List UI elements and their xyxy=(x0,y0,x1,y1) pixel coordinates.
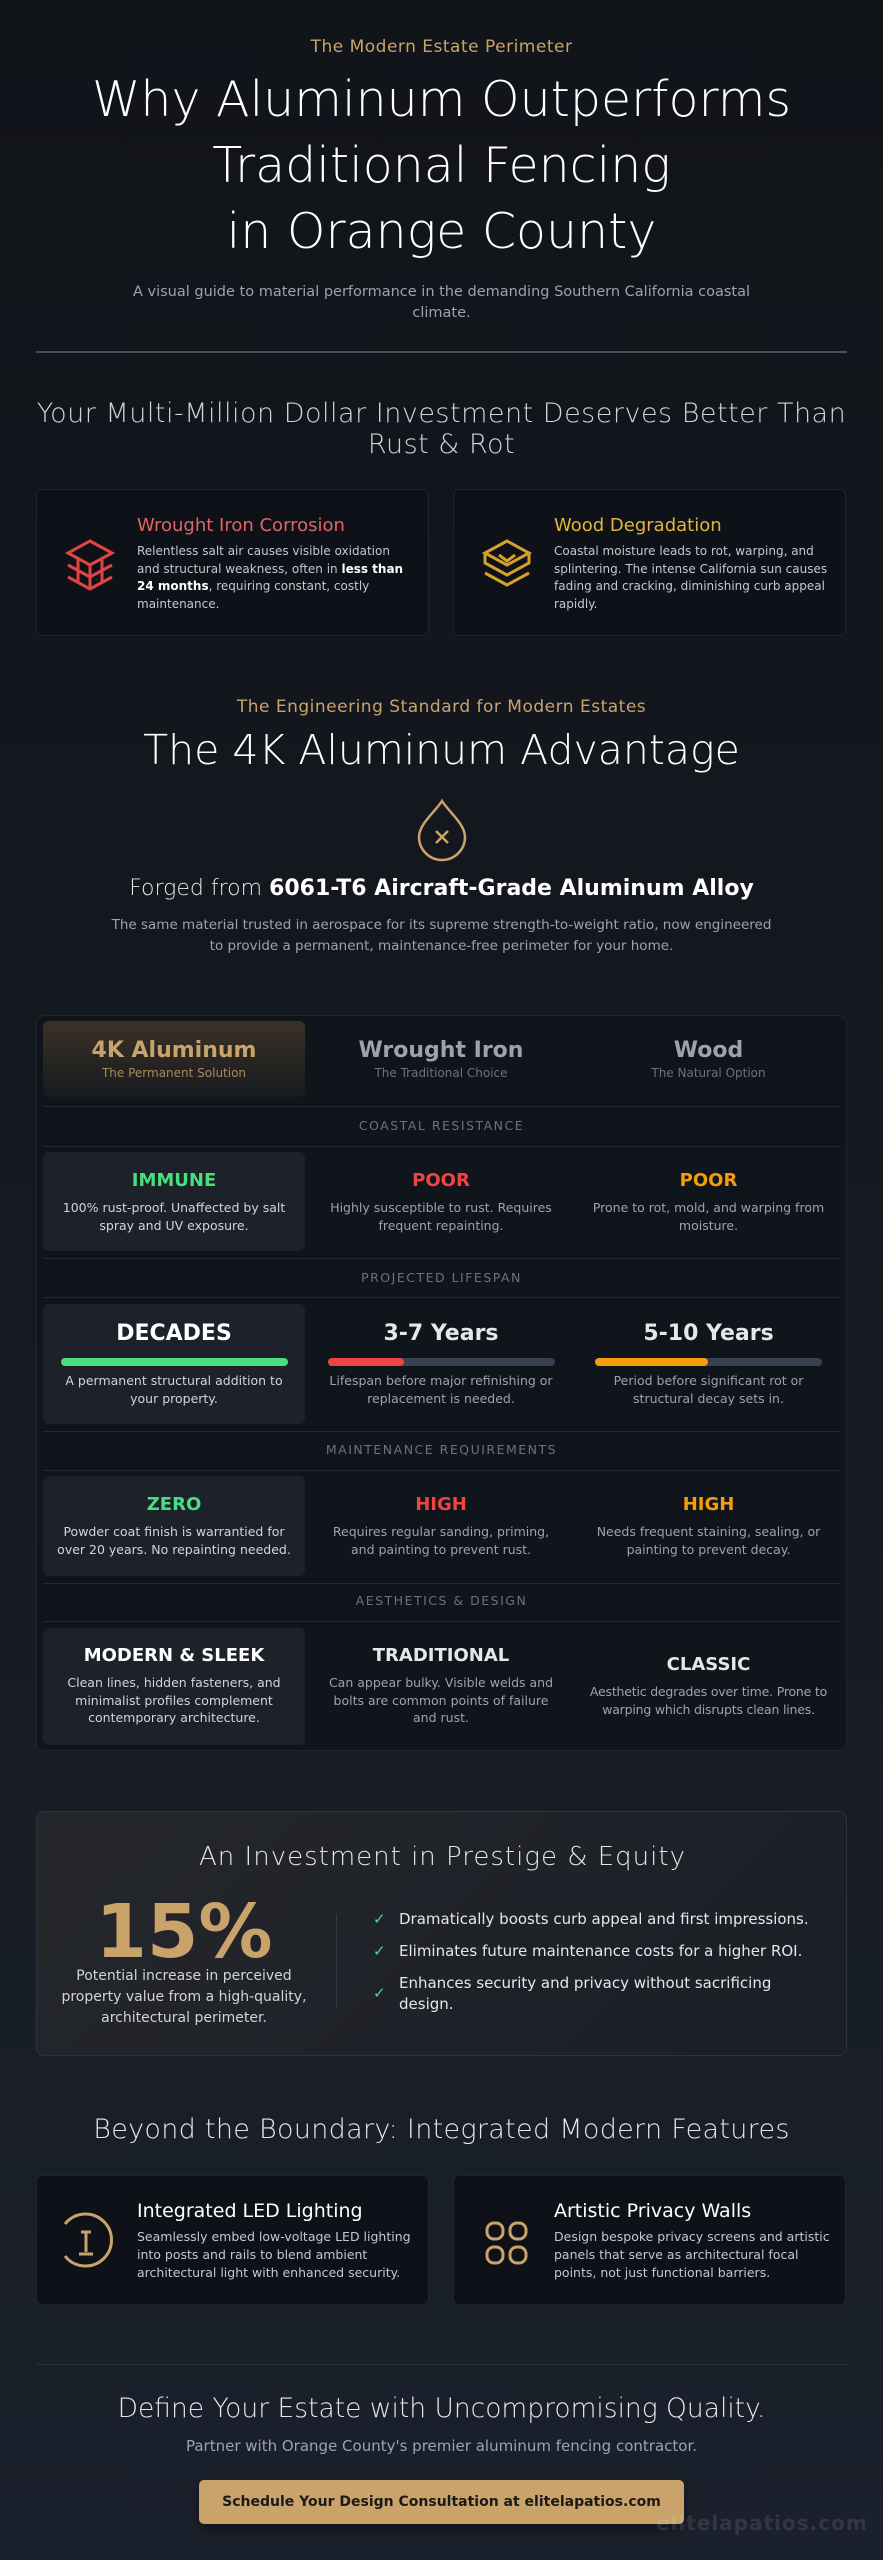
stat caption: Potential increase in perceived property value from a high-quality, architectural perimeter. xyxy=(61,1968,307,2026)
row: coastal resistance: POOR xyxy=(412,1170,470,1191)
row: coastal resistance: 100% rust-proof. Unaffected by salt spray and UV exposure. xyxy=(63,1200,285,1232)
subheading: forged from 6061-T6: Forged from 6061-T6 Aircraft-Grade Aluminum Alloy xyxy=(129,876,754,901)
title: Traditional Fencing xyxy=(212,137,671,194)
watermark: elitelapatios.com xyxy=(656,2511,868,2535)
header: 4K aluminum: The Permanent Solution xyxy=(102,1066,246,1080)
header: wood: Wood xyxy=(674,1038,743,1063)
row: aesthetics: Aesthetic degrades over time. Prone to warping which disrupts clean lines. xyxy=(590,1684,827,1716)
panel: privacy walls xyxy=(453,2175,846,2305)
header: wrought iron: Wrought Iron xyxy=(359,1038,523,1063)
header: wood: The Natural Option xyxy=(651,1066,766,1080)
row: aesthetics: Clean lines, hidden fasteners, and minimalist profiles complement contemporary architecture. xyxy=(67,1675,281,1725)
icon: layered wood xyxy=(482,539,532,587)
label: maintenance requirements: MAINTENANCE REQUIREMENTS xyxy=(326,1442,557,1457)
row: lifespan with bars: 5-10 Years xyxy=(643,1321,774,1346)
heading: 4K aluminum advantage: The 4K Aluminum Advantage xyxy=(143,726,740,774)
comparison table xyxy=(36,1015,847,1751)
row: maintenance xyxy=(43,1476,820,1576)
title: Wood Degradation xyxy=(554,515,722,536)
header: wood xyxy=(651,1038,766,1080)
row: lifespan with bars: Period before significant rot or structural decay sets in. xyxy=(614,1373,803,1406)
row: coastal resistance xyxy=(43,1152,824,1251)
checklist: ✓ xyxy=(373,1984,386,2002)
row: coastal resistance: Highly susceptible to rust. Requires frequent repainting. xyxy=(330,1200,552,1232)
checklist: Dramatically boosts curb appeal and first impressions. xyxy=(399,1910,809,1928)
row: coastal resistance: Prone to rot, mold, and warping from moisture. xyxy=(593,1200,824,1232)
row: maintenance: Powder coat finish is warrantied for over 20 years. No repainting needed. xyxy=(57,1524,291,1556)
heading: define your estate: Define Your Estate with Uncompromising Quality. xyxy=(118,2393,765,2424)
body: Design bespoke privacy screens and artistic panels that serve as architectural focal points, not just functional barriers. xyxy=(554,2229,830,2280)
row: lifespan with bars xyxy=(43,1304,822,1424)
row: lifespan with bars: DECADES xyxy=(116,1321,232,1346)
checklist: Enhances security and privacy without sacrificing design. xyxy=(399,1974,771,2013)
title: Integrated LED Lighting xyxy=(137,2200,363,2222)
row: aesthetics: TRADITIONAL xyxy=(373,1645,509,1666)
text: partner: Partner with Orange County's premier aluminum fencing contractor. xyxy=(186,2437,697,2455)
header: wrought iron xyxy=(359,1038,523,1080)
heading: An Investment in Prestige & Equity xyxy=(199,1842,686,1872)
row: lifespan with bars: Lifespan before major refinishing or replacement is needed. xyxy=(329,1373,553,1406)
checklist: ✓ xyxy=(373,1942,386,1960)
body: Relentless salt air causes visible oxidation and structural weakness, often in less than 24 months, requiring constant, costly maintenance. xyxy=(137,544,403,610)
panel: wood degradation xyxy=(453,489,846,636)
label: projected lifespan: PROJECTED LIFESPAN xyxy=(361,1270,522,1285)
title: Why Aluminum Outperforms xyxy=(92,71,791,128)
row: coastal resistance: POOR xyxy=(680,1170,737,1191)
stat: 15%: 15% xyxy=(95,1889,273,1975)
header: 4K aluminum: 4K Aluminum xyxy=(92,1038,256,1063)
header: wrought iron: The Traditional Choice xyxy=(374,1066,508,1080)
heading: beyond the boundary: Beyond the Boundary: Integrated Modern Features xyxy=(93,2114,790,2145)
row: aesthetics: CLASSIC xyxy=(667,1654,750,1675)
icon: panels grid xyxy=(486,2222,528,2264)
eyebrow: modern estate perimeter: The Modern Estate Perimeter xyxy=(311,37,572,57)
title: Wrought Iron Corrosion xyxy=(137,515,345,536)
eyebrow: engineering standard: The Engineering Standard for Modern Estates xyxy=(237,697,646,717)
checklist: ✓ xyxy=(373,1910,386,1928)
row: maintenance: HIGH xyxy=(683,1494,734,1515)
label: aesthetics and design: AESTHETICS & DESIGN xyxy=(356,1593,527,1608)
row: lifespan with bars: 3-7 Years xyxy=(383,1321,499,1346)
icon: corroded structure xyxy=(65,539,115,591)
subtitle: A visual guide to material performance in the demanding Southern California coastal climate. xyxy=(133,284,750,321)
button: schedule consultation: Schedule Your Design Consultation at elitelapatios.com xyxy=(222,2494,661,2510)
row: aesthetics: Can appear bulky. Visible welds and bolts are common points of failure and rust. xyxy=(329,1675,553,1725)
title xyxy=(92,71,791,260)
panel: wrought iron corrosion xyxy=(36,489,429,636)
row: aesthetics: MODERN & SLEEK xyxy=(84,1645,264,1666)
header: 4K aluminum xyxy=(43,1021,305,1097)
panel: LED lighting xyxy=(36,2175,429,2305)
paragraph: The same material trusted in aerospace for its supreme strength-to-weight ratio, now engineered to provide a permanent, maintenance-free perimeter for your home. xyxy=(112,917,771,954)
title: in Orange County xyxy=(227,203,656,260)
checklist: Eliminates future maintenance costs for a higher ROI. xyxy=(399,1942,802,1960)
body: Coastal moisture leads to rot, warping, and splintering. The intense California sun causes fading and cracking, diminishing curb appeal rapidly. xyxy=(554,544,827,610)
row: maintenance: HIGH xyxy=(415,1494,467,1515)
button: schedule consultation xyxy=(199,2480,684,2524)
checklist xyxy=(373,1910,809,2013)
row: maintenance: Requires regular sanding, priming, and painting to prevent rust. xyxy=(333,1524,549,1556)
heading: investment deserves better: Your Multi-Million Dollar Investment Deserves Better Than Rust & Rot xyxy=(37,398,846,460)
row: lifespan with bars: A permanent structural addition to your property. xyxy=(65,1373,283,1406)
row: maintenance: Needs frequent staining, sealing, or painting to prevent decay. xyxy=(597,1524,820,1556)
icon: lighting xyxy=(64,2212,113,2268)
label: coastal resistance: COASTAL RESISTANCE xyxy=(359,1118,524,1133)
title: Artistic Privacy Walls xyxy=(554,2200,751,2222)
panel: investment in prestige xyxy=(36,1811,847,2056)
body: Seamlessly embed low-voltage LED lighting into posts and rails to blend ambient architectural light with enhanced security. xyxy=(137,2229,411,2280)
row: coastal resistance: IMMUNE xyxy=(132,1170,216,1191)
icon: drop with x xyxy=(418,798,466,862)
row: maintenance: ZERO xyxy=(147,1494,201,1515)
row: aesthetics xyxy=(43,1628,827,1745)
